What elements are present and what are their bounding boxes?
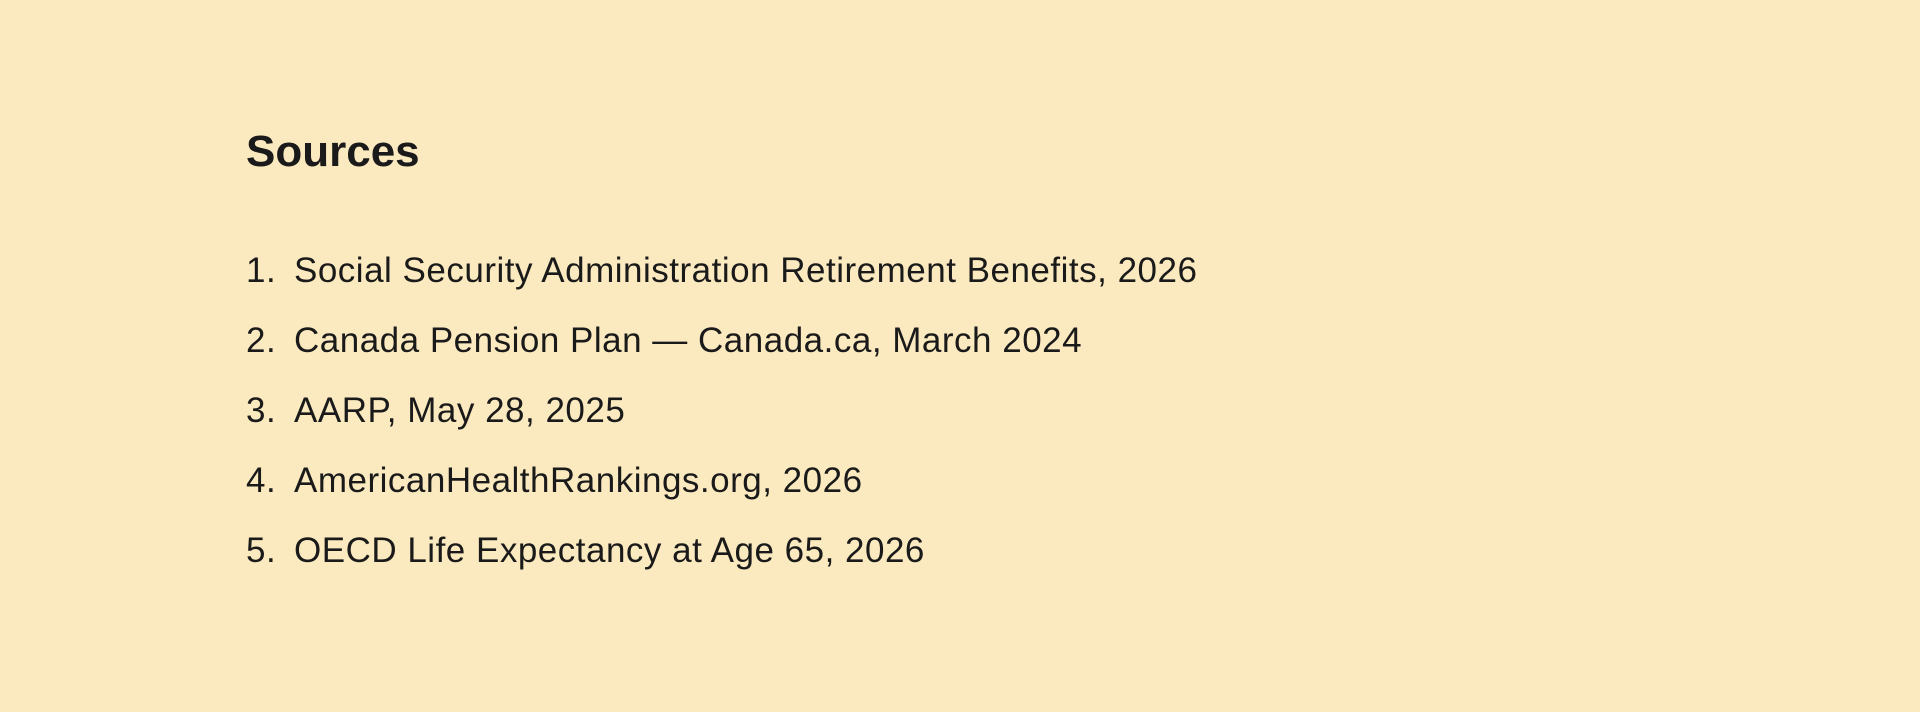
source 4: AmericanHealthRankings.org, 2026 (294, 461, 863, 500)
source 2: 2. (246, 321, 276, 360)
source 1: Social Security Administration Retirement Benefits, 2026 (294, 251, 1197, 290)
source 5: OECD Life Expectancy at Age 65, 2026 (294, 531, 925, 570)
title: Sources (246, 127, 420, 176)
source 4: 4. (246, 461, 276, 500)
source 5: 5. (246, 531, 276, 570)
source 3: 3. (246, 391, 276, 430)
source 1: 1. (246, 251, 276, 290)
sources list (246, 251, 1197, 570)
source 3: AARP, May 28, 2025 (294, 391, 625, 430)
source 2: Canada Pension Plan — Canada.ca, March 2024 (294, 321, 1082, 360)
